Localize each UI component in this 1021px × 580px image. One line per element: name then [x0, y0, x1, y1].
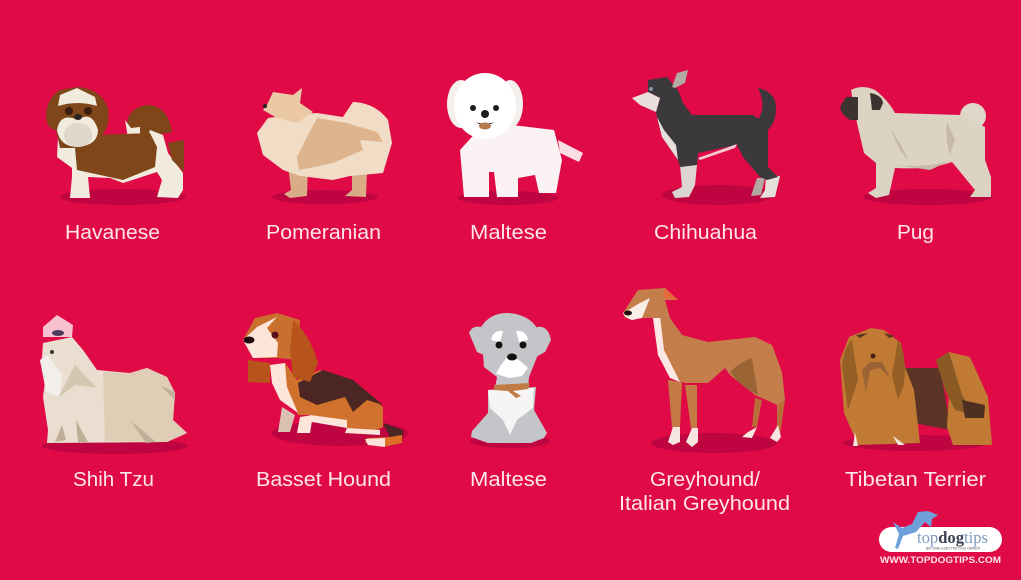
logo url: WWW.TOPDOGTIPS.COM	[880, 555, 1001, 566]
label: Greyhound / Italian Greyhound: Greyhound/	[650, 469, 760, 491]
dog: Maltese (white)	[447, 73, 583, 205]
label: Havanese: Havanese	[65, 222, 160, 244]
dog: Shih Tzu	[40, 315, 188, 454]
logo tagline: BECOME A BETTER DOG OWNER	[926, 546, 980, 550]
dog: Basset Hound	[243, 313, 408, 447]
label: Tibetan Terrier: Tibetan Terrier	[845, 469, 986, 491]
label: Basset Hound: Basset Hound	[256, 469, 391, 491]
label: Chihuahua: Chihuahua	[654, 222, 758, 244]
label: Pug: Pug	[897, 222, 934, 244]
dog: Pomeranian	[257, 88, 392, 204]
dog: Maltese (grey)	[469, 313, 551, 448]
dog: Pug	[840, 87, 993, 205]
logo: Top Dog Tips	[879, 511, 1002, 566]
label: Maltese second: Maltese	[470, 469, 547, 491]
label: Greyhound / Italian Greyhound: Italian Greyhound	[619, 493, 790, 515]
label: Maltese: Maltese	[470, 222, 547, 244]
icon: leaping dog	[893, 511, 938, 549]
dog: Havanese	[46, 87, 186, 205]
logo wordmark: topdogtips	[917, 528, 988, 547]
dog: Greyhound	[623, 288, 785, 453]
label: Greyhound / Italian Greyhound	[619, 469, 790, 515]
label: Shih Tzu: Shih Tzu	[73, 469, 154, 491]
label: Pomeranian: Pomeranian	[266, 222, 381, 244]
dog: Chihuahua	[632, 70, 780, 205]
dog: Tibetan Terrier	[840, 328, 992, 451]
